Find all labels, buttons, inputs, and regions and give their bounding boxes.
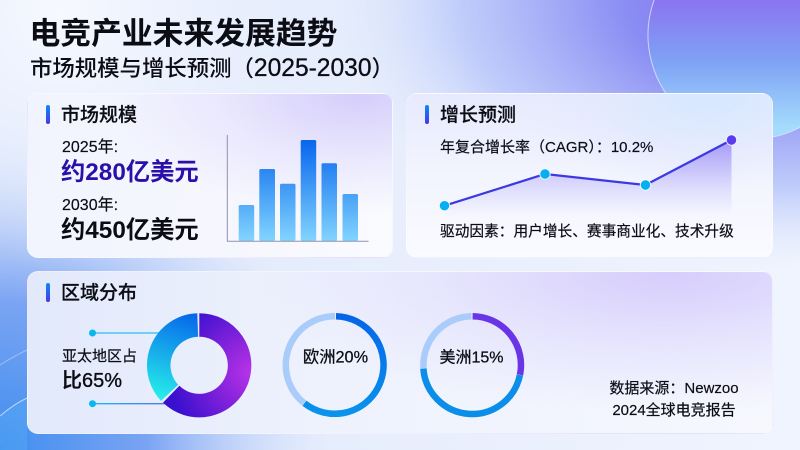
CAGR text: 年复合增长率（CAGR）：10.2% bbox=[440, 139, 653, 156]
value: 2025 market size: 约280亿美元 bbox=[61, 158, 199, 186]
label: 2025: 2025年: bbox=[62, 139, 118, 156]
leader lines bbox=[89, 330, 165, 407]
subtitle: 市场规模与增长预测（2025-2030） bbox=[30, 54, 394, 82]
data source bbox=[609, 380, 739, 418]
heading accent bar bbox=[46, 283, 50, 302]
value: 2030 market size: 约450亿美元 bbox=[61, 216, 199, 244]
panel: market size bbox=[27, 93, 393, 258]
heading: market size: 市场规模 bbox=[61, 105, 137, 126]
ring label: Europe: 欧洲20% bbox=[303, 348, 368, 366]
Asia-Pacific label: 亚太地区占 bbox=[62, 348, 137, 365]
panel: growth forecast bbox=[406, 93, 773, 258]
Asia-Pacific label bbox=[62, 348, 137, 392]
donut ring bbox=[159, 325, 240, 406]
heading: regional distribution: 区域分布 bbox=[61, 283, 137, 304]
title: 电竞产业未来发展趋势 bbox=[30, 16, 337, 50]
driver factors text: 驱动因素：用户增长、赛事商业化、技术升级 bbox=[440, 224, 734, 240]
heading: growth forecast: 增长预测 bbox=[440, 105, 516, 126]
data source: 数据来源：Newzoo bbox=[609, 380, 739, 397]
heading accent bar bbox=[425, 105, 429, 124]
ring label: Americas: 美洲15% bbox=[439, 348, 504, 366]
heading accent bar bbox=[46, 105, 50, 124]
label: 2030: 2030年: bbox=[62, 196, 118, 214]
data source: 2024全球电竞报告 bbox=[612, 402, 736, 418]
Asia-Pacific label: 比65% bbox=[62, 370, 122, 392]
panel: regional distribution bbox=[27, 271, 773, 434]
